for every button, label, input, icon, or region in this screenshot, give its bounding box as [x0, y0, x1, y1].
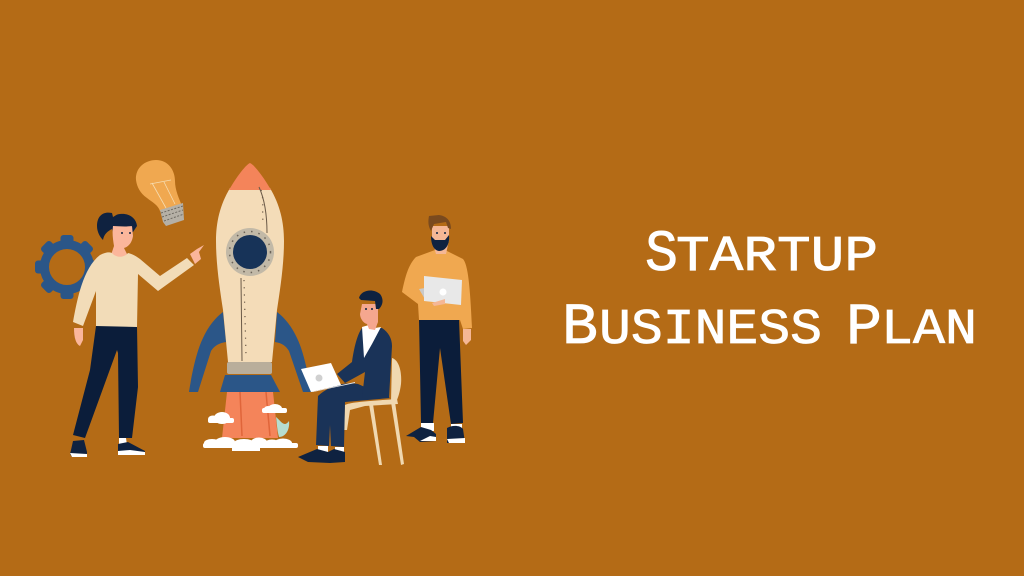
standing man shoes — [406, 427, 436, 442]
standing man hair — [428, 215, 451, 231]
figure: seated man — [298, 291, 404, 465]
title line 1 — [645, 223, 878, 288]
rocket left fin — [189, 312, 226, 392]
standing man sweater — [402, 250, 472, 329]
man shirt — [362, 325, 381, 358]
standing man beard — [431, 235, 449, 251]
man hair — [359, 291, 383, 309]
title line 1: TARTUP — [676, 229, 878, 286]
woman sweater — [73, 252, 194, 327]
rocket body — [216, 188, 284, 362]
woman hands — [74, 328, 83, 346]
smoke clouds — [203, 404, 298, 451]
rocket nose — [229, 163, 271, 190]
rocket flame — [222, 392, 278, 438]
woman socks — [119, 438, 127, 445]
rocket right fin — [275, 312, 311, 392]
title line 2: P — [846, 296, 882, 361]
standing man trousers — [419, 319, 463, 424]
woman shoes — [70, 440, 87, 457]
standing man laptop — [419, 276, 462, 305]
woman trousers — [73, 326, 138, 438]
title line 2: LAN — [881, 302, 977, 359]
chair — [344, 358, 404, 465]
man shoes — [298, 449, 345, 463]
standing man head — [432, 226, 449, 254]
icon: gear — [35, 235, 99, 299]
figure: woman pointing — [70, 213, 204, 457]
standing man hands — [432, 299, 471, 345]
title: Startup Business Plan — [562, 223, 977, 361]
title line 2: USINESS — [599, 302, 822, 359]
standing man socks — [421, 423, 462, 431]
man trousers — [316, 383, 390, 447]
icon: light bulb — [136, 160, 184, 226]
title line 2: B — [562, 296, 598, 361]
man jacket — [337, 328, 392, 398]
man socks — [318, 446, 344, 454]
figure: rocket — [189, 163, 311, 451]
smoke wisp — [276, 417, 289, 437]
rocket seams — [241, 187, 267, 361]
title line 2 — [562, 296, 977, 361]
man head — [360, 304, 378, 330]
man laptop — [301, 363, 355, 392]
rocket band — [227, 362, 272, 374]
figure: standing man with laptop — [402, 215, 472, 443]
woman head and neck — [111, 226, 133, 259]
rocket skirt — [220, 375, 280, 392]
rocket window — [226, 228, 274, 276]
title line 1: S — [645, 223, 678, 288]
woman hair — [97, 213, 137, 240]
